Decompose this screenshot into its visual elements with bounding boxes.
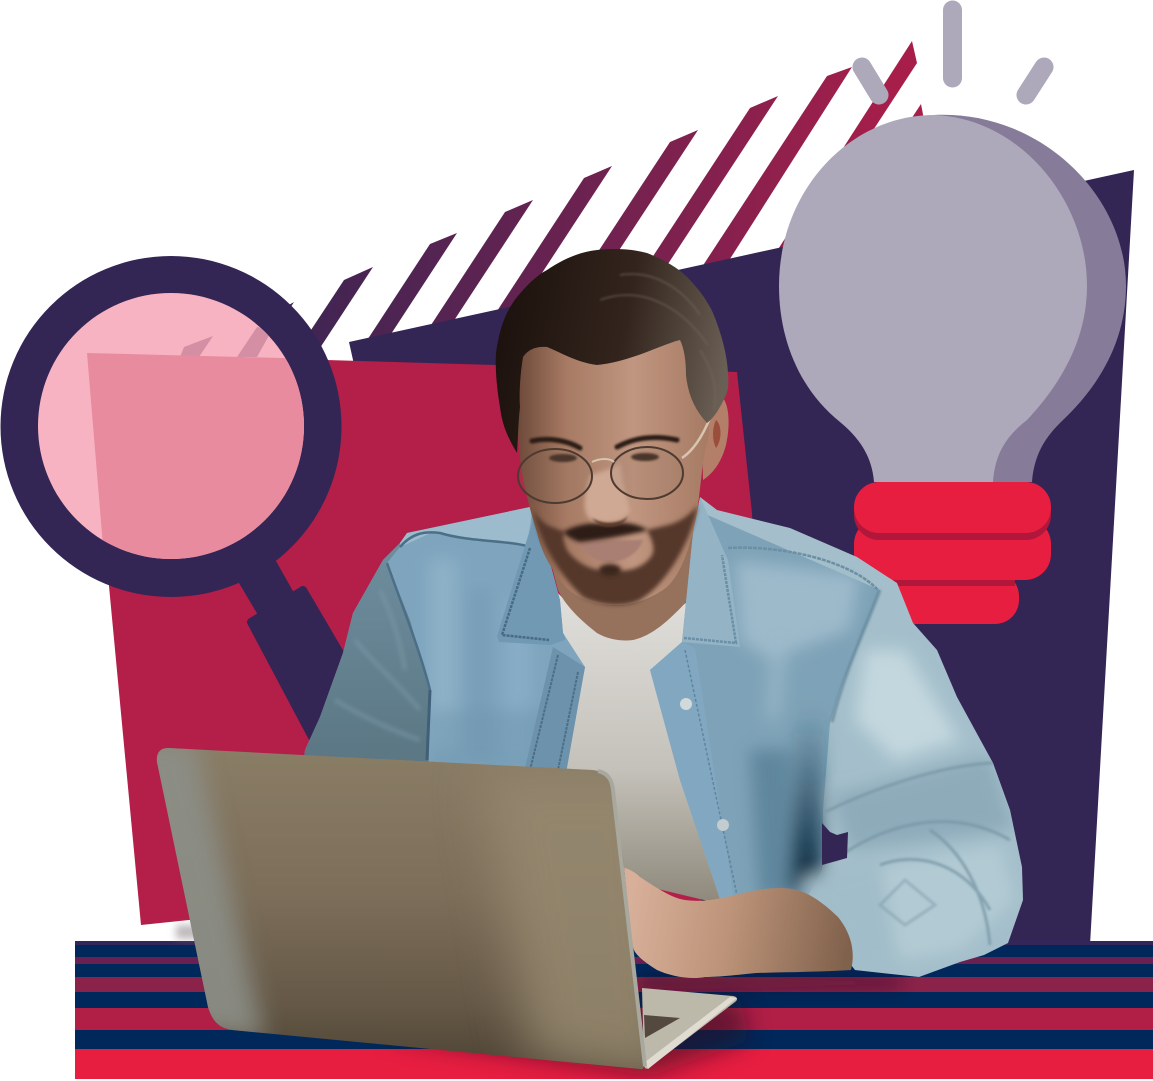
hair highlights bbox=[600, 274, 715, 410]
ear bbox=[702, 397, 729, 480]
shirt buttons bbox=[680, 698, 692, 710]
panel: dark purple background shape bbox=[349, 170, 1134, 945]
beard bbox=[533, 505, 698, 605]
chin patch bbox=[599, 564, 621, 576]
head bbox=[496, 249, 729, 605]
left collar bbox=[497, 520, 565, 645]
sleeve folds bbox=[825, 590, 1010, 945]
magnifier ring bbox=[0, 256, 342, 597]
gap between arm and torso bbox=[822, 823, 848, 865]
moustache bbox=[563, 523, 648, 542]
laptop bbox=[130, 740, 737, 1081]
lips bbox=[580, 540, 643, 562]
table stripes bbox=[75, 941, 1153, 1079]
laptop base bbox=[642, 988, 737, 1069]
right collar bbox=[682, 497, 740, 647]
lid rim bbox=[598, 771, 645, 1066]
denim shirt right side bbox=[650, 497, 1023, 977]
magnifying glass bbox=[0, 256, 352, 737]
glasses bbox=[518, 418, 710, 503]
hair bbox=[496, 249, 728, 453]
lid sheen bbox=[156, 748, 644, 1070]
laptop lid bbox=[157, 748, 644, 1069]
t-shirt bbox=[555, 590, 725, 905]
left shirt shading bbox=[431, 562, 501, 764]
face bbox=[517, 330, 709, 605]
bulb shaded glass bbox=[930, 115, 1126, 482]
panel: crimson background shape bbox=[87, 353, 760, 925]
light bulb bbox=[779, 10, 1126, 624]
left placket bbox=[526, 647, 585, 768]
right placket bbox=[650, 642, 735, 905]
eyebrows bbox=[532, 438, 677, 448]
man bbox=[295, 249, 1040, 990]
bulb rays bbox=[862, 10, 1044, 95]
left sleeve bbox=[304, 543, 429, 762]
bulb base bbox=[854, 482, 1051, 624]
diagonal stripes bbox=[232, 41, 925, 380]
cast shadows bbox=[0, 925, 1153, 1081]
neck bbox=[545, 525, 700, 641]
nose bbox=[585, 462, 630, 522]
denim shirt left side bbox=[304, 507, 585, 769]
magnifier handle bbox=[239, 561, 352, 737]
forearm and hand bbox=[620, 867, 853, 978]
bulb light glass bbox=[779, 115, 1087, 482]
right stitching bbox=[728, 548, 878, 590]
left stitching bbox=[387, 532, 527, 760]
eyes bbox=[549, 453, 659, 462]
left sleeve folds bbox=[336, 636, 420, 741]
torso shading bbox=[735, 560, 1015, 970]
magnifier lens bbox=[38, 293, 304, 559]
torso bbox=[650, 490, 880, 910]
